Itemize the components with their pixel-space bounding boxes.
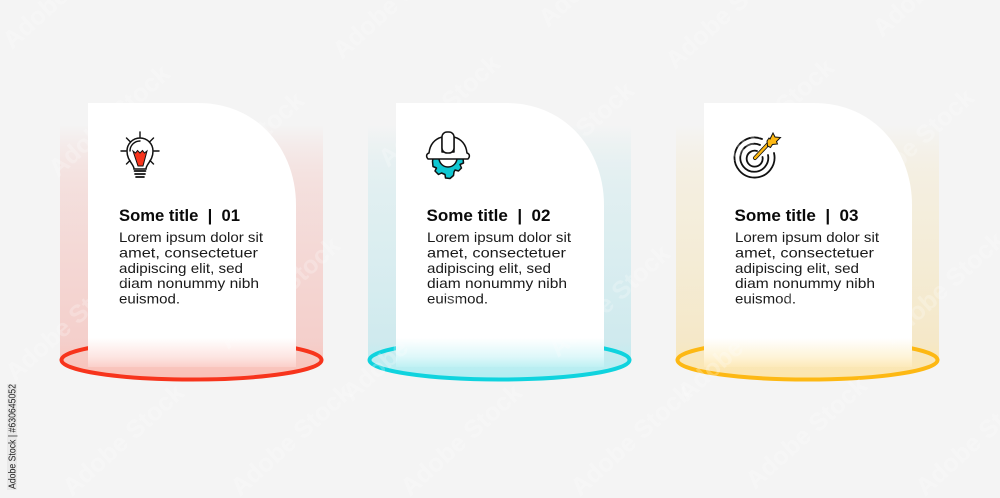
body text 02: [427, 229, 571, 306]
body text 03: diam nonummy nibh: [735, 275, 875, 291]
watermarks: Adobe Stock: [225, 378, 358, 498]
body text 02: amet, consectetuer: [427, 244, 566, 260]
teal glow: [368, 125, 631, 380]
red ring: [62, 340, 322, 380]
watermarks: Adobe Stock: [57, 378, 190, 498]
body text 01: euismod.: [119, 290, 180, 306]
panel: step 01: [60, 103, 323, 380]
watermarks: Adobe Stock: [177, 86, 310, 209]
icon: light bulb: [121, 132, 159, 177]
body text 03: [735, 229, 879, 306]
stock id label: Adobe Stock | #630645052: [8, 384, 18, 489]
title 02: Some title | 02: [426, 206, 550, 225]
watermarks: Adobe Stock: [507, 76, 640, 199]
body text 03: euismod.: [735, 290, 796, 306]
body text 01: amet, consectetuer: [119, 244, 258, 260]
red glow: [60, 125, 323, 380]
body text 02: euismod.: [427, 290, 488, 306]
watermarks: Adobe Stock: [543, 239, 676, 362]
watermarks: Adobe Stock: [672, 283, 805, 406]
title 03: Some title | 03: [734, 206, 858, 225]
teal ring: [370, 340, 630, 380]
watermarks: Adobe Stock: [213, 231, 346, 354]
watermarks: Adobe Stock: [373, 49, 506, 172]
white card: [396, 103, 604, 367]
icon: target and dart: [735, 133, 780, 178]
white card: [88, 103, 296, 367]
watermarks: Adobe Stock: [707, 53, 840, 176]
panel: step 02: [368, 103, 631, 380]
watermarks: Adobe Stock: [43, 59, 176, 182]
yellow glow: [676, 125, 939, 380]
body text 02: Lorem ipsum dolor sit: [427, 229, 571, 245]
white card: [704, 103, 912, 367]
icon: hard hat and gear: [427, 132, 469, 178]
body text 01: adipiscing elit, sed: [119, 260, 243, 276]
title 01: Some title | 01: [119, 206, 240, 225]
watermarks: Adobe Stock: [337, 283, 470, 406]
body text 01: [119, 229, 263, 306]
body text 01: Lorem ipsum dolor sit: [119, 229, 263, 245]
watermarks: Adobe Stock: [395, 378, 528, 498]
watermarks: Adobe Stock: [565, 378, 698, 498]
watermarks: Adobe Stock: [0, 263, 133, 386]
watermarks: Adobe Stock: [847, 83, 980, 206]
panel: step 03: [676, 103, 939, 380]
body text 01: diam nonummy nibh: [119, 275, 259, 291]
body text 02: adipiscing elit, sed: [427, 260, 551, 276]
watermarks: Adobe Stock: [740, 371, 873, 494]
body text 02: diam nonummy nibh: [427, 275, 567, 291]
body text 03: Lorem ipsum dolor sit: [735, 229, 879, 245]
yellow ring: [678, 340, 938, 380]
body text 03: amet, consectetuer: [735, 244, 874, 260]
body text 03: adipiscing elit, sed: [735, 260, 859, 276]
